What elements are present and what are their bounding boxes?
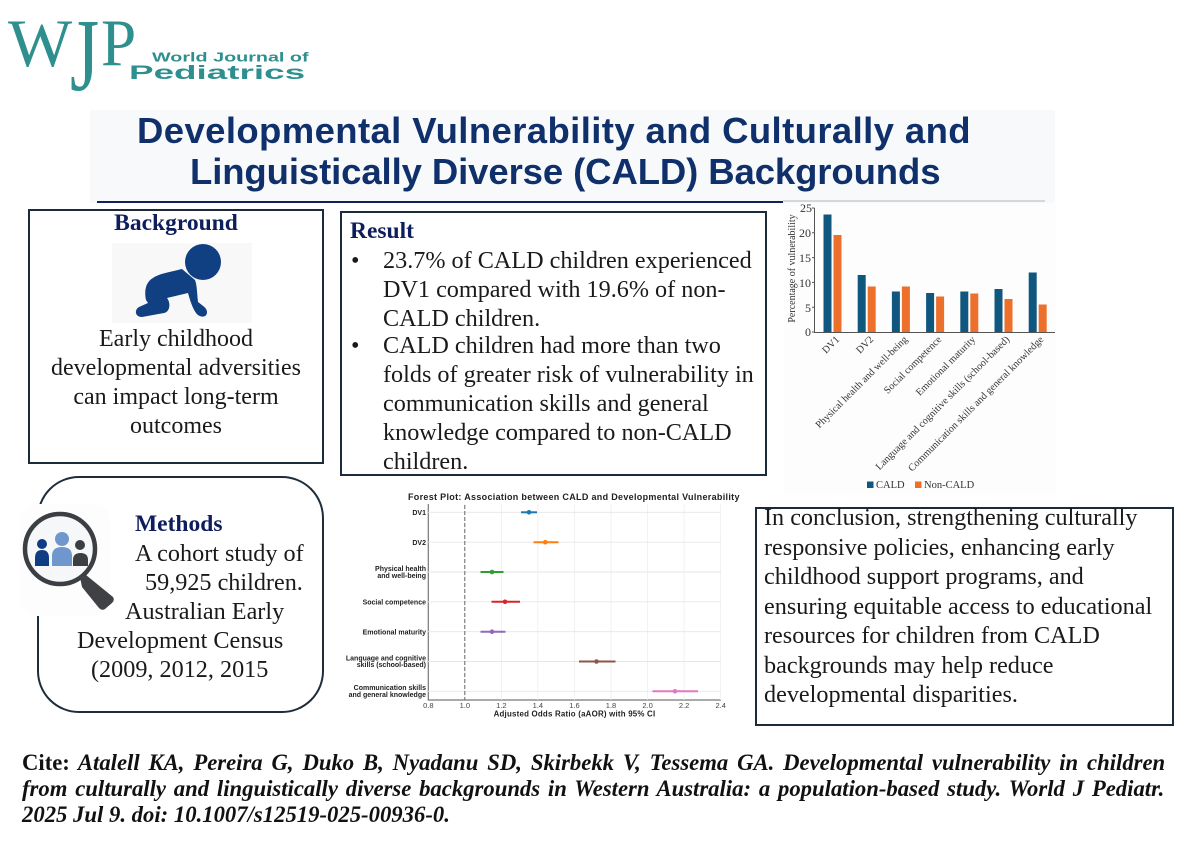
methods text: Development Census xyxy=(77,627,283,654)
background text xyxy=(51,326,301,439)
result bullet 2 xyxy=(351,332,754,475)
row labels: Emotional maturity xyxy=(363,629,426,636)
background text: Early childhood xyxy=(99,326,253,352)
category labels: Emotional maturity xyxy=(914,334,979,398)
conclusion text: backgrounds may help reduce xyxy=(764,652,1053,678)
title text xyxy=(137,110,971,192)
logo letters WJP: P xyxy=(101,7,136,80)
result bullet 2: CALD children had more than two xyxy=(383,332,721,359)
row labels: Communication skills xyxy=(354,685,426,692)
methods heading: Methods xyxy=(135,511,222,537)
row labels: skills (school-based) xyxy=(357,662,426,669)
result bullet 2: knowledge compared to non-CALD xyxy=(383,419,732,446)
category labels xyxy=(814,334,1046,474)
bar chart: percentage of vulnerability xyxy=(787,203,1055,491)
row labels: and well-being xyxy=(377,573,426,580)
category labels: DV2 xyxy=(854,334,876,356)
methods text xyxy=(77,540,304,683)
methods text: (2009, 2012, 2015 xyxy=(91,656,268,683)
conclusion text: developmental disparities. xyxy=(764,681,1018,708)
x axis ticks: 1.2 xyxy=(496,701,507,710)
citation xyxy=(22,750,1165,827)
methods text: A cohort study of xyxy=(135,540,304,567)
conclusion text: childhood support programs, and xyxy=(764,563,1084,590)
result bullet 1: 23.7% of CALD children experienced xyxy=(383,247,752,274)
row labels: Language and cognitive xyxy=(346,656,426,662)
conclusion text: resources for children from CALD xyxy=(764,622,1100,649)
panel: result xyxy=(340,211,767,476)
y axis: 10 xyxy=(799,276,811,290)
background text: developmental adversities xyxy=(51,355,301,381)
icon: magnifying glass with people xyxy=(22,504,114,616)
background heading: Background xyxy=(114,210,238,236)
background text: can impact long-term xyxy=(73,384,279,410)
logo journal name xyxy=(129,50,309,84)
logo journal name: Pediatrics xyxy=(129,62,305,84)
plot frame and grid xyxy=(428,504,721,700)
category labels: Physical health and well-being xyxy=(814,334,910,431)
row labels: and general knowledge xyxy=(349,692,426,699)
x axis title: Adjusted Odds Ratio (aAOR) with 95% CI xyxy=(494,710,655,718)
row labels: DV1 xyxy=(412,510,426,517)
row labels: Social competence xyxy=(363,600,426,606)
conclusion text: ensuring equitable access to educational xyxy=(764,592,1152,620)
citation: from culturally and linguistically diverse backgrounds in Western Australia: a population-based study. World J Pediatr. xyxy=(22,776,1164,800)
category labels: Social competence xyxy=(882,334,944,396)
x axis ticks: 1.0 xyxy=(460,701,470,710)
result heading: Result xyxy=(350,218,414,244)
title banner xyxy=(90,110,1055,203)
y axis: 15 xyxy=(799,251,811,265)
CALD bars xyxy=(824,214,1037,332)
category labels: Language and cognitive skills (school-based) xyxy=(874,334,1012,473)
result bullet 2: children. xyxy=(383,448,468,475)
methods text: 59,925 children. xyxy=(145,569,303,596)
x axis ticks xyxy=(423,701,726,710)
row labels: DV2 xyxy=(412,540,426,547)
x axis ticks: 1.6 xyxy=(569,701,580,710)
legend xyxy=(867,480,975,491)
conclusion text xyxy=(764,504,1152,708)
y axis: 5 xyxy=(805,301,811,315)
conclusion text: responsive policies, enhancing early xyxy=(764,534,1115,560)
result bullet 2: • xyxy=(351,332,359,359)
result bullet 1: DV1 compared with 19.6% of non- xyxy=(383,276,726,303)
title text: Developmental Vulnerability and Culturally and xyxy=(137,110,971,151)
legend: CALD xyxy=(876,480,905,491)
logo journal name: World Journal of xyxy=(152,50,309,65)
methods text: Australian Early xyxy=(125,598,284,625)
panel: background xyxy=(28,209,324,464)
x axis ticks: 2.4 xyxy=(715,701,726,710)
result bullet 1: CALD children. xyxy=(383,305,540,332)
x axis ticks: 1.8 xyxy=(606,701,616,710)
icon: crawling baby xyxy=(136,244,221,317)
logo: World Journal of Pediatrics xyxy=(8,0,309,100)
category labels: Communication skills and general knowledge xyxy=(906,334,1046,474)
title text: Linguistically Diverse (CALD) Backgrounds xyxy=(190,151,940,192)
logo letters WJP: W xyxy=(8,5,73,81)
x axis ticks: 2.2 xyxy=(679,701,689,710)
citation: Cite: Atalell KA, Pereira G, Duko B, Nyadanu SD, Skirbekk V, Tessema GA. Developmental vulnerability in children xyxy=(22,750,1165,775)
y axis title: Percentage of vulnerability xyxy=(787,214,798,323)
citation: 2025 Jul 9. doi: 10.1007/s12519-025-00936-0. xyxy=(22,802,450,827)
forest plot title: Forest Plot: Association between CALD and Developmental Vulnerability xyxy=(408,492,740,502)
logo letters WJP xyxy=(8,0,136,113)
row labels: Physical health xyxy=(375,566,426,573)
category labels: DV1 xyxy=(820,334,842,356)
x axis ticks: 0.8 xyxy=(423,701,434,710)
result bullet 1: • xyxy=(351,247,359,274)
background text: outcomes xyxy=(130,413,222,439)
y axis: 0 xyxy=(805,325,811,339)
result bullet 2: folds of greater risk of vulnerability in xyxy=(383,361,754,388)
forest plot xyxy=(346,492,740,718)
legend: Non-CALD xyxy=(924,480,975,491)
result bullet 1 xyxy=(351,247,752,332)
panel: conclusion xyxy=(755,507,1174,726)
y axis: 20 xyxy=(799,226,811,240)
x axis ticks: 2.0 xyxy=(642,701,653,710)
non-CALD bars xyxy=(834,235,1047,332)
panel: methods xyxy=(37,476,324,713)
estimates and confidence intervals xyxy=(480,510,698,694)
result bullet 2: communication skills and general xyxy=(383,390,709,417)
conclusion text: In conclusion, strengthening culturally xyxy=(764,504,1137,531)
y axis xyxy=(799,201,1055,339)
x axis ticks: 1.4 xyxy=(533,701,543,710)
row labels xyxy=(346,510,426,699)
